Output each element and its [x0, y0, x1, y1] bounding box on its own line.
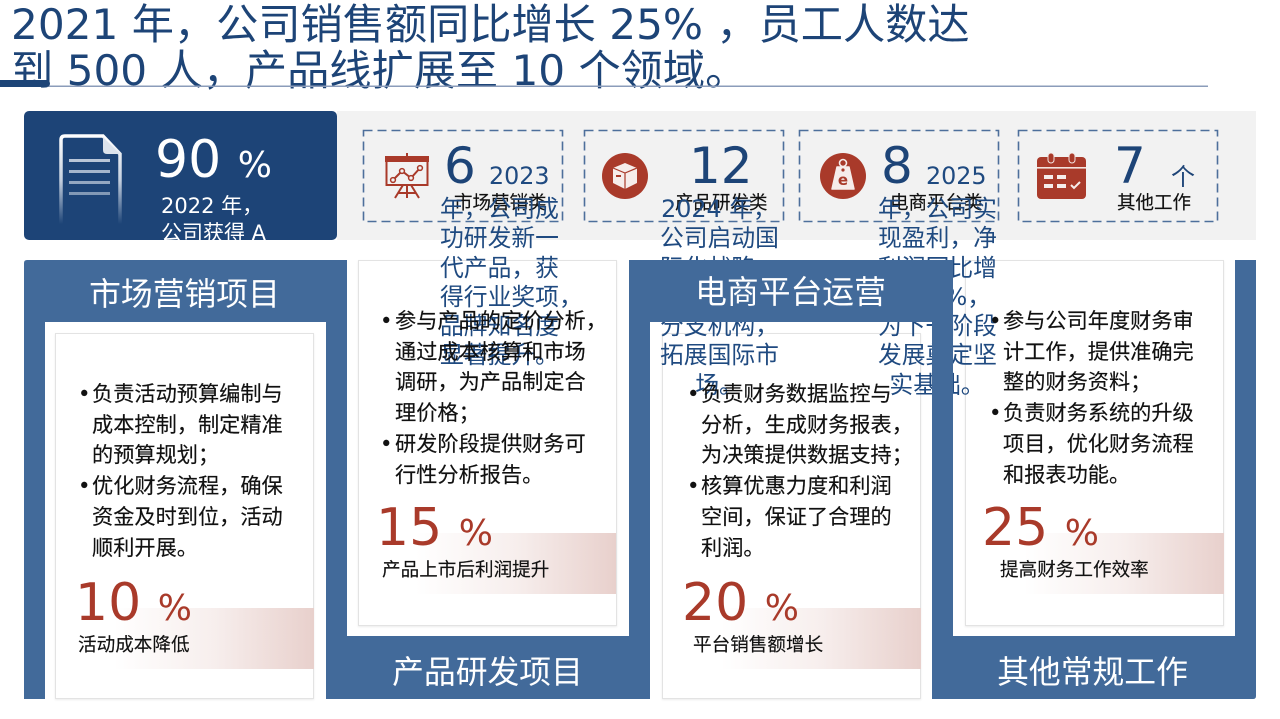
card — [965, 260, 1224, 626]
card — [662, 333, 921, 699]
body text: 整的财务资料； — [1003, 369, 1151, 394]
stat: 10%: 10 % — [75, 573, 192, 633]
icon: presentation chart — [385, 153, 429, 198]
body text: 调研，为产品制定合 — [395, 369, 586, 394]
stat number: 7: 7 — [1114, 137, 1146, 195]
frame — [344, 260, 632, 699]
floating text: 2023: 代产品，获 — [440, 254, 559, 282]
body text: 研发阶段提供财务可 — [395, 431, 586, 456]
title — [11, 0, 970, 95]
floating text: 2023: 得行业奖项， — [440, 283, 583, 311]
floating text: 2023: 品牌知名度 — [440, 312, 559, 340]
body text — [1003, 308, 1194, 487]
body text: 行性分析报告。 — [395, 462, 543, 487]
stat number: 6: 6 — [444, 137, 476, 195]
floating text: 2024 — [660, 195, 779, 399]
body text: 成本控制，制定精准 — [92, 412, 283, 437]
body text: 负责活动预算编制与 — [92, 381, 283, 406]
floating text: 2024: 际化战略， — [660, 254, 779, 282]
bullets — [989, 308, 1002, 425]
frame — [648, 260, 934, 699]
frame — [950, 260, 1256, 699]
stat caption: 活动成本降低 — [78, 635, 190, 656]
stat caption: 平台销售额增长 — [693, 635, 823, 656]
title: 到 500 人，产品线扩展至 10 个领域。 — [11, 46, 747, 95]
stat caption: 产品上市后利润提升 — [382, 560, 549, 581]
bullets — [380, 308, 392, 456]
bullets: • — [687, 381, 700, 406]
stats band background — [337, 111, 1256, 240]
floating text: 2024: 设立海外 — [671, 283, 767, 311]
stat box: other work — [1018, 130, 1218, 222]
body text: 空间，保证了合理的 — [701, 504, 892, 529]
body text: 资金及时到位，活动 — [92, 504, 283, 529]
bullets: • — [380, 431, 392, 456]
heading: 其他常规工作 — [997, 654, 1188, 691]
floating text: 2024: 2024 年， — [661, 195, 777, 223]
stat number: 12: 12 — [689, 137, 753, 195]
body text: 理价格； — [395, 400, 480, 425]
icon: calendar — [1037, 153, 1086, 199]
panel: 90 percent highlight — [24, 111, 337, 240]
stat box: e-commerce — [798, 130, 1000, 222]
stat: 15%: 15 % — [376, 498, 493, 558]
stat: 90 %: 90 % — [155, 130, 272, 190]
body text: 顺利开展。 — [92, 535, 198, 560]
floating text: 2024: 拓展国际市 — [660, 341, 779, 369]
heading: 市场营销项目 — [89, 276, 280, 313]
body text: 计工作，提供准确完 — [1003, 339, 1194, 364]
panel: product R&D project — [344, 260, 632, 699]
body text: 项目，优化财务流程 — [1003, 431, 1194, 456]
floating text: 2025: 2025 — [926, 162, 987, 190]
body text: 负责财务系统的升级 — [1003, 400, 1194, 425]
floating text: 2025: 现盈利，净 — [878, 224, 997, 252]
stat description: 2022 年， — [161, 194, 263, 218]
card — [55, 333, 314, 699]
floating text: 2025 — [878, 162, 997, 399]
icon: box — [602, 153, 648, 199]
stat: 20%: 20 % — [682, 573, 799, 633]
floating text: 2023 — [440, 162, 583, 369]
stat: 25%: 25 % — [982, 498, 1099, 558]
bullets — [78, 381, 90, 498]
bullets: • — [989, 308, 1002, 333]
stat box: marketing — [362, 130, 564, 222]
floating text: 2024: 公司启动国 — [660, 224, 779, 252]
stat label: product: 产品研发类 — [675, 193, 768, 214]
panel: other routine work — [950, 260, 1256, 699]
stat number: 8: 8 — [881, 137, 913, 195]
title: 2021 年，公司销售额同比增长 25% ，员工人数达 — [11, 0, 970, 49]
body text: 分析，生成财务报表， — [701, 412, 913, 437]
body text — [92, 381, 283, 560]
gradient — [416, 533, 616, 594]
bullets: • — [989, 400, 1002, 425]
floating text: 2025: 长 30%， — [883, 283, 991, 311]
stat label: e-commerce: 电商平台类 — [890, 193, 983, 214]
floating text: 2025: 利润同比增 — [878, 254, 997, 282]
floating text: 2023: 年，公司成 — [440, 195, 559, 223]
body text: 利润。 — [701, 535, 765, 560]
body text: 通过成本核算和市场 — [395, 339, 586, 364]
panel: marketing project — [24, 260, 328, 700]
gradient — [1024, 533, 1224, 594]
body text: 的预算规划； — [92, 442, 219, 467]
stat label: other work: 其他工作 — [1117, 193, 1191, 214]
body text: 优化财务流程，确保 — [92, 473, 283, 498]
floating text: 2024: 场。 — [695, 371, 743, 399]
body text — [395, 308, 607, 487]
floating text: 2023: 2023 — [489, 162, 550, 190]
stat box: product — [584, 130, 784, 222]
floating text: 2023: 功研发新一 — [440, 224, 559, 252]
stat caption: 提高财务工作效率 — [1000, 560, 1149, 581]
panel: e-commerce operations — [648, 260, 934, 700]
heading: 产品研发项目 — [392, 654, 583, 691]
body text: 为决策提供数据支持； — [701, 442, 913, 467]
bullets: • — [380, 308, 392, 333]
body text: 和报表功能。 — [1003, 462, 1130, 487]
bullets: • — [78, 473, 90, 498]
card — [358, 260, 617, 626]
icon: e-commerce bag: e — [838, 171, 848, 189]
bullets: • — [687, 473, 700, 498]
stat description — [161, 194, 266, 240]
stat unit: 个 — [1171, 163, 1195, 191]
gradient — [721, 608, 921, 669]
body text — [701, 381, 913, 560]
body text: 参与公司年度财务审 — [1003, 308, 1194, 333]
floating text: 2025: 实基础。 — [889, 371, 985, 399]
heading: 电商平台运营 — [695, 274, 886, 311]
floating text: 2023: 显著提升。 — [440, 341, 559, 369]
floating text: 2024: 分支机构， — [660, 312, 779, 340]
icon: e-commerce bag — [820, 153, 866, 199]
floating text: 2025: 发展奠定坚 — [878, 341, 997, 369]
bullets: • — [78, 381, 90, 406]
floating text: 2025: 年，公司实 — [878, 195, 997, 223]
frame — [24, 260, 328, 699]
stat label: marketing: 市场营销类 — [454, 193, 547, 214]
bullets — [687, 381, 700, 498]
floating text: 2025: 为下一阶段 — [878, 312, 997, 340]
title rule — [0, 80, 1208, 87]
icon: document — [59, 134, 122, 222]
body text: 核算优惠力度和利润 — [701, 473, 892, 498]
body text: 负责财务数据监控与 — [701, 381, 892, 406]
body text: 参与产品的定价分析， — [395, 308, 607, 333]
gradient — [114, 608, 314, 669]
